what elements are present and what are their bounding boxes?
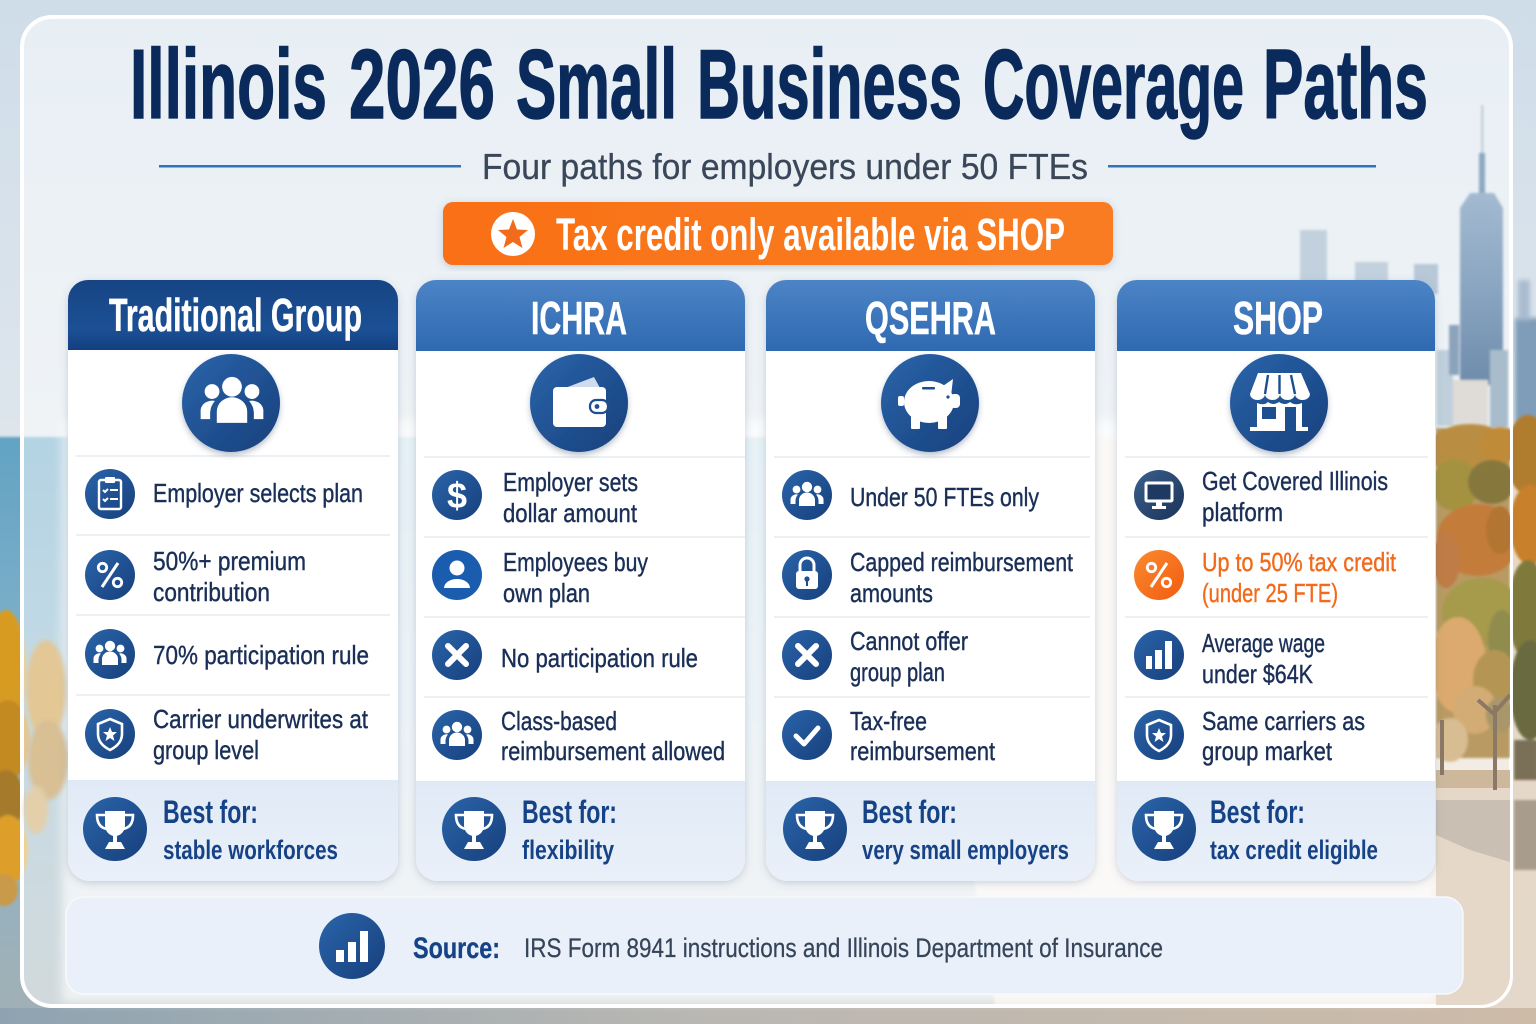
row: employer selects plan: Employer selects plan <box>153 478 363 508</box>
best for: tax credit eligible: tax credit eligible <box>1210 835 1378 865</box>
icon: star badge <box>491 212 535 256</box>
row: premium contribution: contribution <box>153 577 270 607</box>
title: Paths <box>1263 29 1428 139</box>
row: premium contribution <box>85 546 306 607</box>
row: employees buy own plan: Employees buy <box>503 547 648 577</box>
row: Get Covered Illinois platform: Get Covered Illinois <box>1202 466 1388 496</box>
icon: wallet <box>530 354 628 452</box>
source bar: Source: <box>413 932 500 965</box>
panel: Traditional Group <box>68 280 398 881</box>
row: under 50 FTEs <box>782 470 1039 520</box>
row: no participation rule: No participation rule <box>501 643 698 673</box>
row: under 50 FTEs: Under 50 FTEs only <box>850 482 1039 512</box>
heading: SHOP <box>1233 292 1323 344</box>
row: premium contribution: 50%+ premium <box>153 546 306 576</box>
row: carrier underwrites: Carrier underwrites at <box>153 704 369 734</box>
icon: group of people <box>182 354 280 452</box>
row: same carriers: group market <box>1202 736 1333 766</box>
row: same carriers <box>1134 706 1365 766</box>
row: tax-free reimbursement: Tax-free <box>850 706 927 736</box>
row: capped reimbursement <box>782 547 1074 608</box>
heading: Traditional Group <box>109 289 362 341</box>
best for: very small employers <box>783 794 1069 865</box>
icon: piggy bank <box>881 354 979 452</box>
best for: stable workforces <box>83 794 338 865</box>
row: capped reimbursement: amounts <box>850 578 933 608</box>
title: Business <box>697 29 962 139</box>
title <box>130 29 1428 139</box>
row: class-based reimbursement: reimbursement allowed <box>501 736 725 766</box>
row: class-based reimbursement <box>432 706 725 766</box>
row: cannot offer group plan <box>782 626 968 687</box>
row: Get Covered Illinois platform: platform <box>1202 497 1283 527</box>
row: sets dollar amount: Employer sets <box>503 467 638 497</box>
best for: flexibility: Best for: <box>522 794 617 830</box>
row: carrier underwrites <box>85 704 369 765</box>
panel: ICHRA <box>416 280 745 881</box>
source bar <box>66 897 1463 994</box>
best for: flexibility <box>442 794 617 865</box>
row: employees buy own plan: own plan <box>503 578 590 608</box>
row: average wage: under $64K <box>1202 659 1314 689</box>
icon: storefront <box>1230 354 1328 452</box>
best for: stable workforces: stable workforces <box>163 835 338 865</box>
row: class-based reimbursement: Class-based <box>501 706 617 736</box>
subtitle with side rules: Four paths for employers under 50 FTEs <box>482 146 1088 187</box>
best for: very small employers: very small employers <box>862 835 1069 865</box>
row: employees buy own plan <box>432 547 648 608</box>
row: cannot offer group plan: group plan <box>850 657 945 687</box>
heading: QSEHRA <box>865 292 996 344</box>
row: cannot offer group plan: Cannot offer <box>850 626 968 656</box>
callout banner: tax credit <box>443 202 1113 265</box>
row: Get Covered Illinois platform <box>1134 466 1388 527</box>
title: Illinois <box>130 29 327 139</box>
best for: stable workforces: Best for: <box>163 794 258 830</box>
best for: tax credit eligible <box>1132 794 1378 865</box>
row: up to 50% tax credit <box>1134 547 1397 608</box>
row: participation rule <box>85 629 369 679</box>
title: 2026 <box>349 29 495 139</box>
row: participation rule: 70% participation rule <box>153 640 369 670</box>
row: carrier underwrites: group level <box>153 735 259 765</box>
faded foliage at left of panel <box>24 640 68 834</box>
row: average wage: Average wage <box>1202 628 1325 658</box>
best for: flexibility: flexibility <box>522 835 614 865</box>
panel: QSEHRA <box>766 280 1095 881</box>
row: same carriers: Same carriers as <box>1202 706 1365 736</box>
title: Coverage <box>983 29 1244 139</box>
row: sets dollar amount: $ <box>447 475 467 516</box>
row: employer selects plan <box>85 469 363 519</box>
soft wash behind cards <box>62 420 1436 1002</box>
row: up to 50% tax credit: Up to 50% tax credit <box>1202 547 1397 577</box>
best for: very small employers: Best for: <box>862 794 957 830</box>
row: sets dollar amount <box>432 467 638 528</box>
row: no participation rule <box>432 630 698 680</box>
title: Small <box>516 29 677 139</box>
source bar: IRS Form 8941 instructions and Illinois Department of Insurance <box>524 933 1163 963</box>
row: tax-free reimbursement: reimbursement <box>850 736 996 766</box>
row: up to 50% tax credit: (under 25 FTE) <box>1202 578 1338 608</box>
autumn trees at right of panel <box>1436 422 1510 1005</box>
faded skyline inside panel <box>1300 105 1508 428</box>
row: average wage <box>1134 628 1325 689</box>
best for: tax credit eligible: Best for: <box>1210 794 1305 830</box>
row: sets dollar amount: dollar amount <box>503 498 638 528</box>
heading: ICHRA <box>531 292 627 344</box>
row: tax-free reimbursement <box>782 706 996 766</box>
callout banner: tax credit: Tax credit only available via SHOP <box>556 209 1065 260</box>
icon: bar chart <box>319 913 385 979</box>
row: capped reimbursement: Capped reimbursement <box>850 547 1074 577</box>
panel: SHOP <box>1117 280 1435 881</box>
